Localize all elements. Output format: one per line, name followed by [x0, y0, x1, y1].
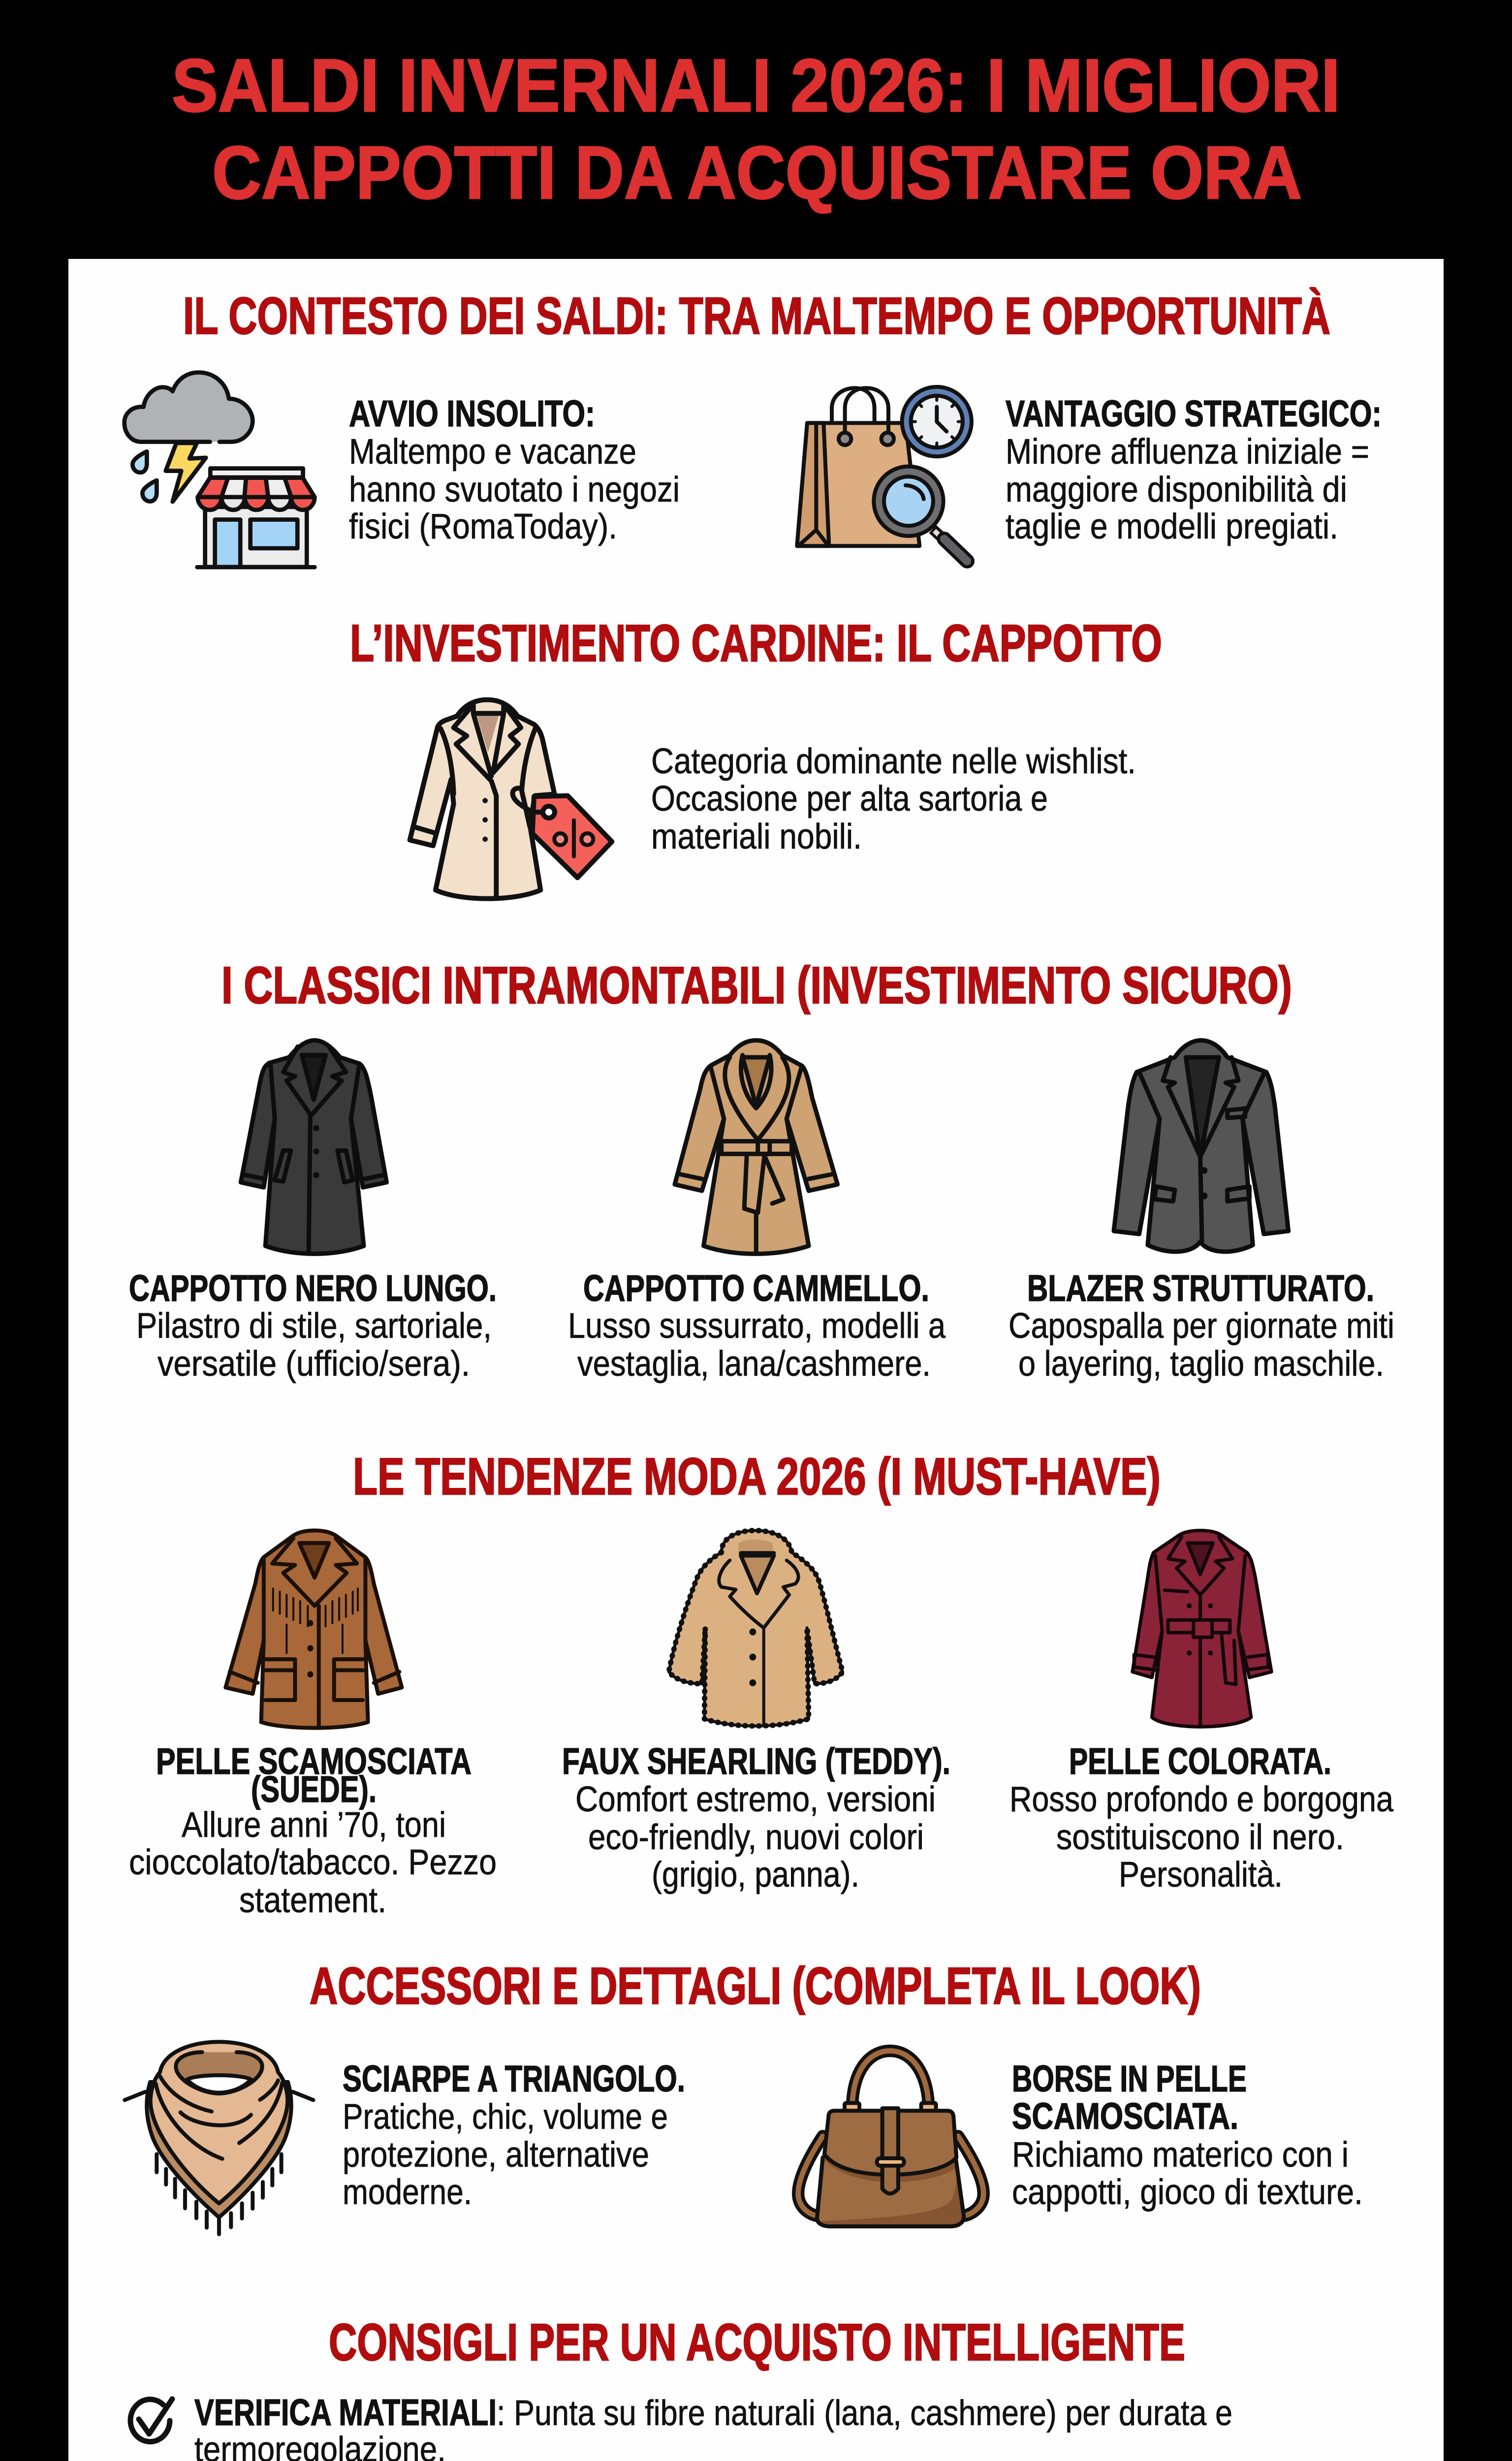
- icon: storm cloud over shop: [125, 373, 315, 567]
- text block: sciarpe a triangolo: moderne.: [343, 2173, 472, 2212]
- list item: verifica materiali: [130, 2392, 1232, 2461]
- text block: avvio insolito: fisici (RomaToday).: [349, 507, 617, 546]
- caption: pelle scamosciata: (SUEDE).: [251, 1768, 377, 1810]
- title: CAPPOTTI DA ACQUISTARE ORA: [212, 131, 1302, 215]
- text block: sciarpe a triangolo: SCIARPE A TRIANGOLO.: [343, 2058, 685, 2099]
- caption: cappotto nero lungo: [129, 1267, 497, 1384]
- text block: avvio insolito: AVVIO INSOLITO:: [349, 393, 595, 434]
- text block: vantaggio strategico: maggiore disponibilità di: [1006, 470, 1347, 509]
- icon: suede handbag: [798, 2051, 983, 2226]
- icon: beige coat with discount tag: [410, 700, 612, 899]
- text block: borse in pelle scamosciata: [1012, 2058, 1363, 2212]
- text block: avvio insolito: [349, 393, 680, 546]
- text block: vantaggio strategico: [1006, 393, 1382, 546]
- caption: blazer strutturato: Capospalla per giornate miti: [1008, 1306, 1394, 1346]
- heading: consigli per un acquisto intelligente: CONSIGLI PER UN ACQUISTO INTELLIGENTE: [329, 2313, 1185, 2371]
- text block: categoria dominante: [651, 742, 1136, 856]
- text block: sciarpe a triangolo: protezione, alternative: [343, 2135, 649, 2175]
- text block: borse in pelle scamosciata: Richiamo materico con i: [1012, 2135, 1349, 2175]
- caption: pelle scamosciata: statement.: [239, 1881, 386, 1920]
- list item: verifica materiali: : Punta su fibre naturali (lana, cashmere) per durata e: [497, 2394, 1232, 2433]
- caption: blazer strutturato: BLAZER STRUTTURATO.: [1027, 1267, 1374, 1309]
- icon: faux shearling teddy coat: [669, 1531, 843, 1726]
- caption: pelle scamosciata: [129, 1740, 497, 1920]
- caption: cappotto cammello: [568, 1267, 946, 1384]
- icon: camel wrap coat: [675, 1041, 838, 1254]
- icon: triangle scarf: [125, 2042, 314, 2234]
- text block: avvio insolito: hanno svuotato i negozi: [349, 470, 680, 509]
- caption: faux shearling: (grigio, panna).: [652, 1855, 859, 1894]
- text block: categoria dominante: materiali nobili.: [651, 817, 862, 856]
- caption: pelle colorata: PELLE COLORATA.: [1069, 1740, 1331, 1782]
- heading: le tendenze moda: LE TENDENZE MODA 2026 (I MUST-HAVE): [353, 1448, 1161, 1506]
- text block: sciarpe a triangolo: [343, 2058, 685, 2212]
- caption: pelle colorata: [1009, 1740, 1394, 1894]
- heading: accessori e dettagli: ACCESSORI E DETTAGLI (COMPLETA IL LOOK): [310, 1957, 1201, 2015]
- caption: cappotto nero lungo: versatile (ufficio/sera).: [158, 1344, 470, 1384]
- caption: cappotto nero lungo: CAPPOTTO NERO LUNGO.: [129, 1267, 497, 1309]
- icon: structured grey blazer: [1114, 1041, 1289, 1252]
- text block: vantaggio strategico: Minore affluenza iniziale =: [1006, 432, 1369, 472]
- caption: cappotto nero lungo: Pilastro di stile, sartoriale,: [136, 1306, 492, 1346]
- text block: categoria dominante: Categoria dominante nelle wishlist.: [651, 742, 1136, 781]
- icon: check mark: [130, 2399, 172, 2442]
- caption: pelle colorata: Personalità.: [1119, 1855, 1283, 1894]
- caption: pelle scamosciata: cioccolato/tabacco. Pezzo: [129, 1843, 497, 1882]
- caption: pelle scamosciata: PELLE SCAMOSCIATA: [156, 1740, 472, 1782]
- text block: borse in pelle scamosciata: SCAMOSCIATA.: [1012, 2095, 1238, 2137]
- text block: sciarpe a triangolo: Pratiche, chic, volume e: [343, 2097, 668, 2137]
- caption: cappotto cammello: vestaglia, lana/cashmere.: [577, 1344, 931, 1384]
- heading: investimento cardine: L’INVESTIMENTO CARDINE: IL CAPPOTTO: [350, 614, 1162, 672]
- caption: faux shearling: [562, 1740, 950, 1894]
- icon: suede fringe coat: [225, 1531, 402, 1728]
- icon: shopping bag with clock and magnifier: [797, 387, 972, 561]
- caption: cappotto cammello: CAPPOTTO CAMMELLO.: [583, 1267, 929, 1309]
- text block: categoria dominante: Occasione per alta sartoria e: [651, 779, 1048, 819]
- caption: pelle colorata: Rosso profondo e borgogna: [1009, 1780, 1394, 1819]
- text block: vantaggio strategico: taglie e modelli pregiati.: [1006, 507, 1338, 546]
- caption: pelle colorata: sostituiscono il nero.: [1056, 1818, 1344, 1857]
- caption: pelle scamosciata: Allure anni ’70, toni: [182, 1805, 446, 1845]
- text block: vantaggio strategico: VANTAGGIO STRATEGICO:: [1006, 393, 1382, 434]
- caption: blazer strutturato: [1008, 1267, 1394, 1384]
- text block: avvio insolito: Maltempo e vacanze: [349, 432, 636, 472]
- caption: blazer strutturato: o layering, taglio maschile.: [1018, 1344, 1384, 1384]
- text block: borse in pelle scamosciata: BORSE IN PELLE: [1012, 2058, 1247, 2099]
- title: SALDI INVERNALI 2026: I MIGLIORI: [172, 44, 1340, 127]
- caption: cappotto cammello: Lusso sussurrato, modelli a: [568, 1306, 946, 1346]
- icon: long black coat: [241, 1041, 386, 1254]
- caption: faux shearling: FAUX SHEARLING (TEDDY).: [562, 1740, 950, 1782]
- icon: burgundy leather trench: [1133, 1531, 1271, 1727]
- caption: faux shearling: eco-friendly, nuovi colori: [588, 1818, 924, 1857]
- list item: verifica materiali: VERIFICA MATERIALI: [194, 2392, 497, 2433]
- text block: borse in pelle scamosciata: cappotti, gioco di texture.: [1012, 2173, 1363, 2212]
- caption: faux shearling: Comfort estremo, versioni: [575, 1780, 936, 1819]
- title: [172, 44, 1340, 215]
